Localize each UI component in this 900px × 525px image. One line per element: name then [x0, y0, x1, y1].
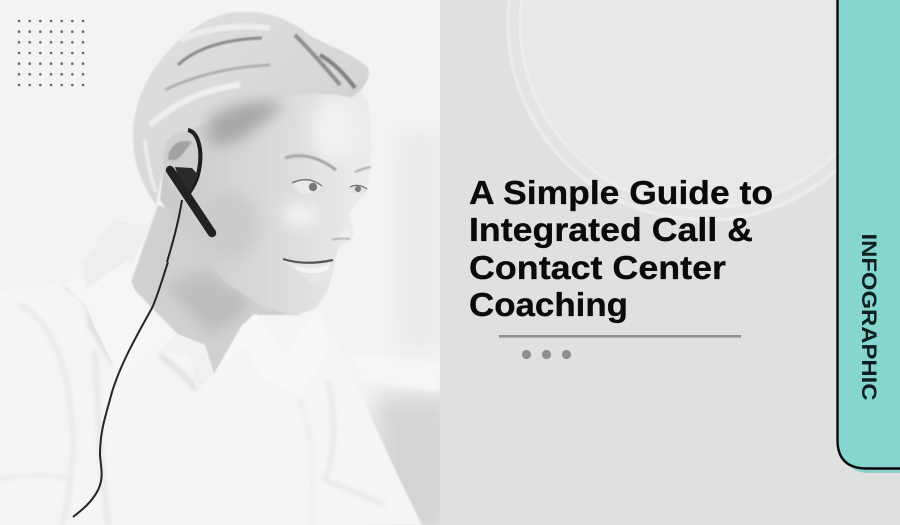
collar [65, 281, 257, 372]
title: A Simple Guide to [469, 174, 773, 211]
hair [133, 12, 369, 206]
tab label: INFOGRAPHIC [857, 234, 881, 400]
decorative ring circle [506, 0, 836, 222]
headset cable [73, 262, 168, 517]
neck [130, 205, 300, 374]
panel: teal infographic tab [838, 0, 900, 473]
facial features [283, 156, 371, 286]
title: Contact Center [469, 249, 726, 286]
divider line [499, 335, 741, 338]
ear [164, 132, 192, 163]
three dots [522, 350, 571, 359]
panel: right grey background [440, 0, 900, 525]
title: Integrated Call & [469, 211, 753, 248]
dot grid [18, 20, 84, 86]
panel: photo of woman with headset [0, 0, 455, 525]
title: Coaching [469, 286, 628, 323]
headset [167, 130, 212, 262]
shirt [66, 287, 422, 525]
head and face [160, 70, 372, 316]
title [469, 174, 773, 323]
